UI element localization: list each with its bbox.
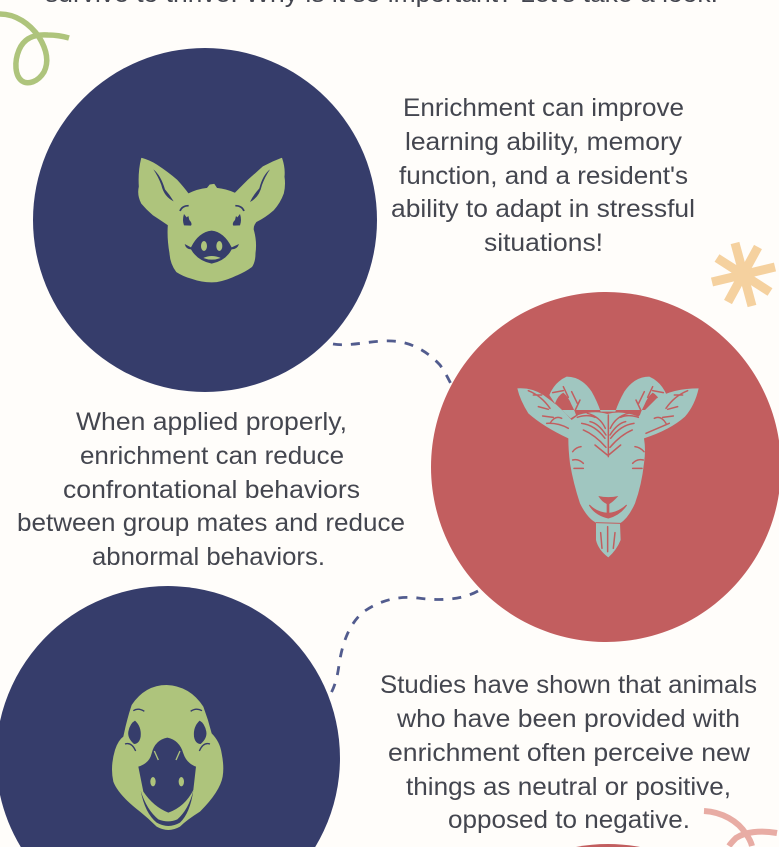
text block: learning ability: situations!	[484, 229, 603, 257]
text block: confrontational behaviors: confrontational behaviors	[63, 476, 360, 504]
icon: pig head	[139, 158, 285, 282]
text block: learning ability: Enrichment can improve	[403, 94, 684, 122]
text block: confrontational behaviors: abnormal behaviors.	[92, 543, 325, 571]
panel: goat circle with icon	[431, 292, 779, 642]
panel: turtle circle with icon	[0, 586, 340, 847]
text block: learning ability: ability to adapt in stressful	[391, 195, 695, 223]
text block: confrontational behaviors: enrichment can reduce	[80, 442, 344, 470]
text block: studies	[380, 671, 757, 834]
text block: learning ability: learning ability, memory	[405, 128, 683, 156]
connector: dashed line from pig to goat	[333, 341, 451, 384]
decoration: green squiggle	[0, 14, 69, 83]
icon: turtle head	[112, 685, 223, 830]
icon: goat head	[517, 377, 699, 557]
panel: pig circle with icon	[33, 48, 377, 392]
text block: learning ability	[391, 94, 695, 257]
text block: studies: opposed to negative.	[448, 806, 690, 834]
text block: confrontational behaviors	[17, 408, 405, 571]
decoration: pink squiggle	[704, 811, 777, 846]
text block: studies: things as neutral or positive,	[406, 773, 731, 801]
text block: learning ability: function, and a resident's	[399, 162, 688, 190]
text block: studies: who have been provided with	[396, 705, 740, 733]
text block: studies: Studies have shown that animals	[380, 671, 757, 699]
connector: dashed line from goat to turtle	[329, 591, 478, 697]
panel: next red circle (cropped)	[576, 844, 640, 847]
text block: studies: enrichment often perceive new	[388, 739, 751, 767]
decoration: orange asterisk	[712, 243, 775, 306]
text block: confrontational behaviors: between group mates and reduce	[17, 509, 405, 537]
text block: confrontational behaviors: When applied properly,	[76, 408, 347, 436]
